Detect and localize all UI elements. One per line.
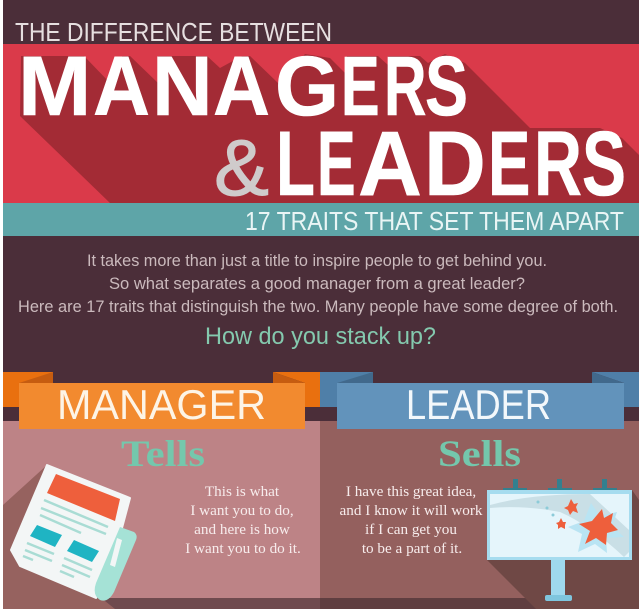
heading: tells: Tells: [121, 434, 205, 475]
title: managers: N: [152, 39, 213, 133]
leader text: [340, 483, 483, 557]
title: managers: G: [275, 39, 339, 133]
intro text: So what separates a good manager from a great leader?: [109, 274, 525, 293]
title: leaders: R: [534, 113, 582, 215]
header kicker: THE DIFFERENCE BETWEEN: [15, 17, 332, 47]
panel: manager: [3, 372, 322, 609]
title: managers: A: [213, 39, 270, 133]
title: leaders: E: [488, 113, 530, 215]
icon: newspaper: [11, 465, 137, 601]
title: leaders: A: [358, 113, 422, 215]
subtitle band: [3, 203, 639, 236]
title: managers: E: [341, 39, 380, 133]
title: managers: S: [425, 39, 468, 133]
manager text: [185, 483, 301, 557]
orange ribbon: MANAGER: [57, 381, 266, 428]
intro text: [18, 251, 618, 316]
leader text: if I can get you: [365, 521, 457, 538]
ampersand: &: [214, 123, 269, 212]
title: managers: M: [18, 39, 91, 133]
panel: leader: [320, 372, 639, 609]
dark background: [3, 0, 639, 421]
manager text: I want you to do,: [190, 502, 294, 519]
call to action: How do you stack up?: [205, 323, 436, 350]
blue ribbon: LEADER: [406, 381, 551, 428]
leader text: to be a part of it.: [362, 540, 462, 557]
icon: billboard: [487, 479, 632, 601]
title: leaders: E: [317, 113, 356, 215]
title: managers: A: [93, 39, 150, 133]
newspaper shadow: [3, 465, 115, 609]
leader text: and I know it will work: [340, 502, 483, 519]
heading: sells: Sells: [438, 434, 521, 475]
intro text: Here are 17 traits that distinguish the two. Many people have some degree of both.: [18, 297, 618, 316]
manager text: This is what: [205, 483, 280, 500]
blue ribbon: [320, 372, 639, 429]
title: leaders: D: [424, 113, 486, 215]
title: leaders: L: [276, 113, 315, 215]
intro text: It takes more than just a title to inspire people to get behind you.: [87, 251, 547, 270]
leader text: I have this great idea,: [346, 483, 476, 500]
manager text: and here is how: [194, 521, 290, 538]
title banner: [3, 39, 639, 215]
title: managers: R: [384, 39, 426, 133]
billboard shadow: [487, 490, 639, 609]
orange ribbon: [3, 372, 322, 429]
manager text: I want you to do it.: [185, 540, 301, 557]
